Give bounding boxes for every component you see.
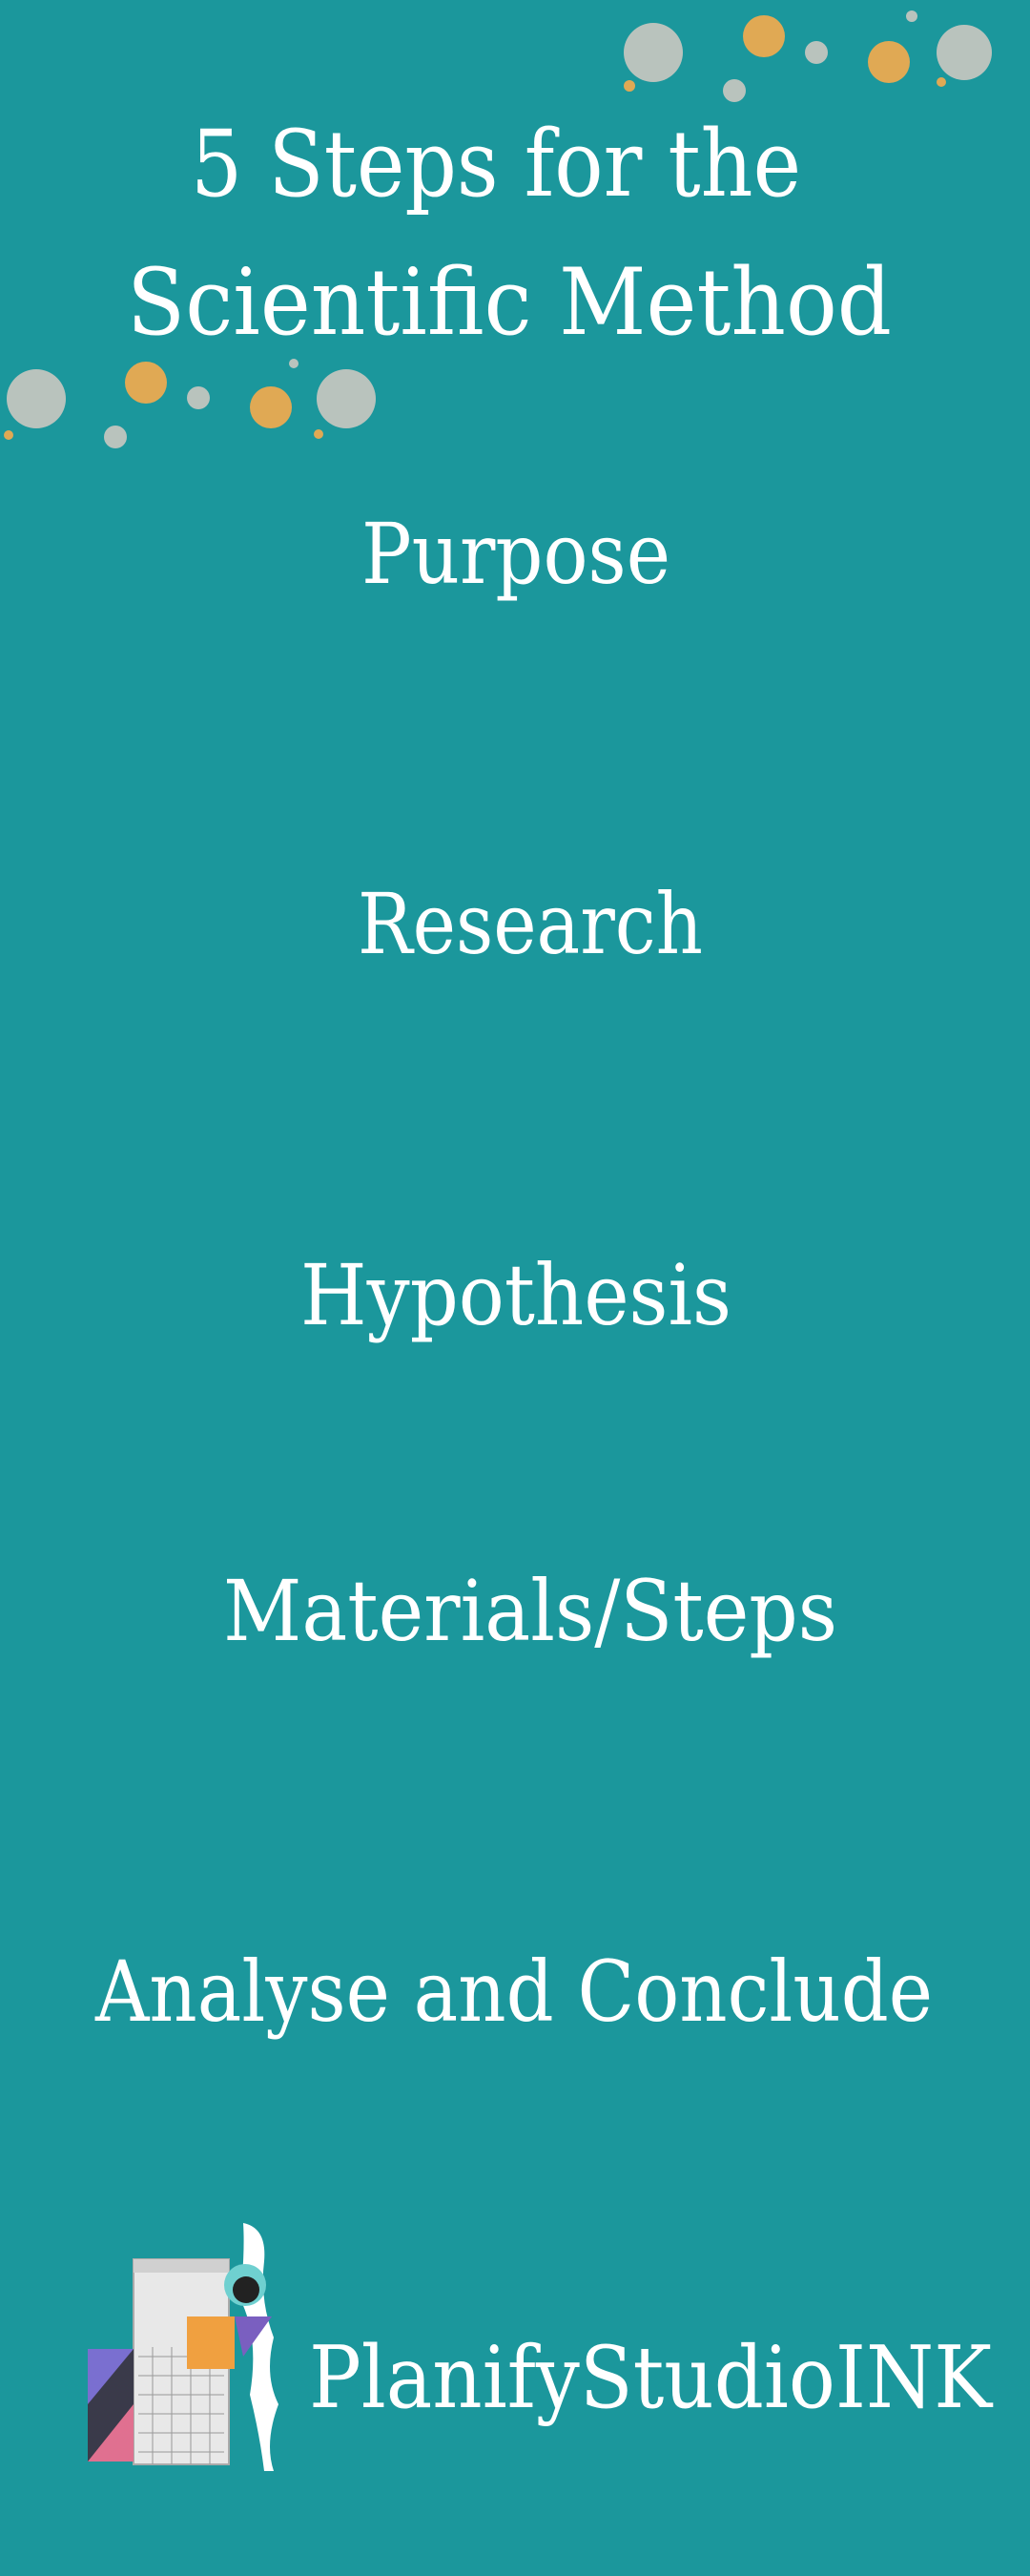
step 1: Purpose: Purpose (361, 505, 670, 603)
title (127, 111, 892, 356)
decoration: top-right dots (624, 10, 992, 102)
decoration: bottom-left dots (4, 359, 376, 448)
step 2: Research: Research (358, 875, 703, 973)
title: Scientific Method (127, 249, 892, 356)
title: 5 Steps for the (191, 111, 801, 218)
logo icon (88, 2223, 278, 2471)
step 3: Hypothesis: Hypothesis (300, 1246, 731, 1344)
step 5: Analyse and Conclude: Analyse and Conclude (94, 1942, 933, 2041)
step 4: Materials/Steps: Materials/Steps (223, 1562, 837, 1660)
